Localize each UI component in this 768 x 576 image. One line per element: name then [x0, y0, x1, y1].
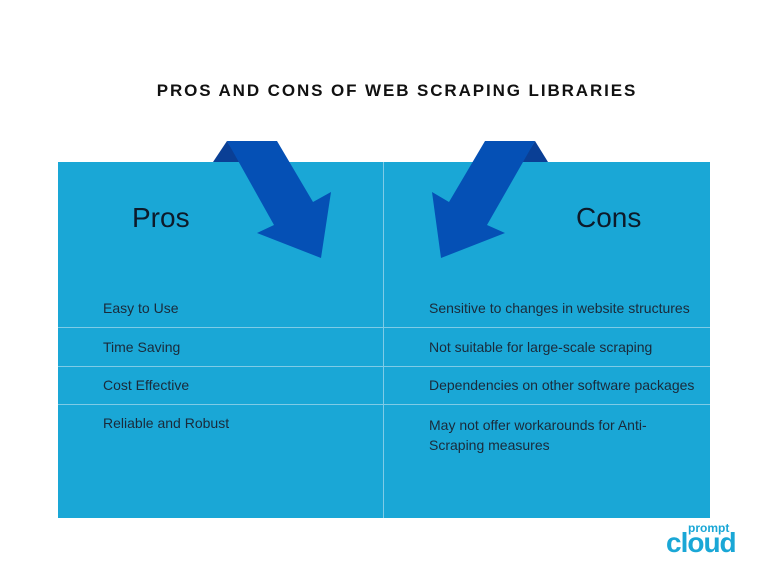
text: Reliable and Robust [103, 415, 229, 431]
text: Sensitive to changes in website structures [429, 300, 690, 316]
text: Not suitable for large-scale scraping [429, 339, 652, 355]
logo: prompt [688, 521, 729, 535]
logo: cloud [666, 527, 736, 558]
text: Cost Effective [103, 377, 189, 393]
heading: Pros: Pros [132, 202, 190, 233]
panel: table [58, 162, 710, 518]
arrow: left [213, 141, 331, 258]
text: Time Saving [103, 339, 180, 355]
list: pros [103, 300, 230, 431]
text: May not offer workarounds for Anti-Scraping measures [429, 417, 647, 453]
arrow: right [432, 141, 548, 258]
title: PROS AND CONS OF WEB SCRAPING LIBRARIES [157, 81, 637, 100]
text: Easy to Use [103, 300, 178, 316]
heading: Cons: Cons [576, 202, 641, 233]
text: Dependencies on other software packages [429, 377, 694, 393]
list: cons [429, 300, 694, 453]
